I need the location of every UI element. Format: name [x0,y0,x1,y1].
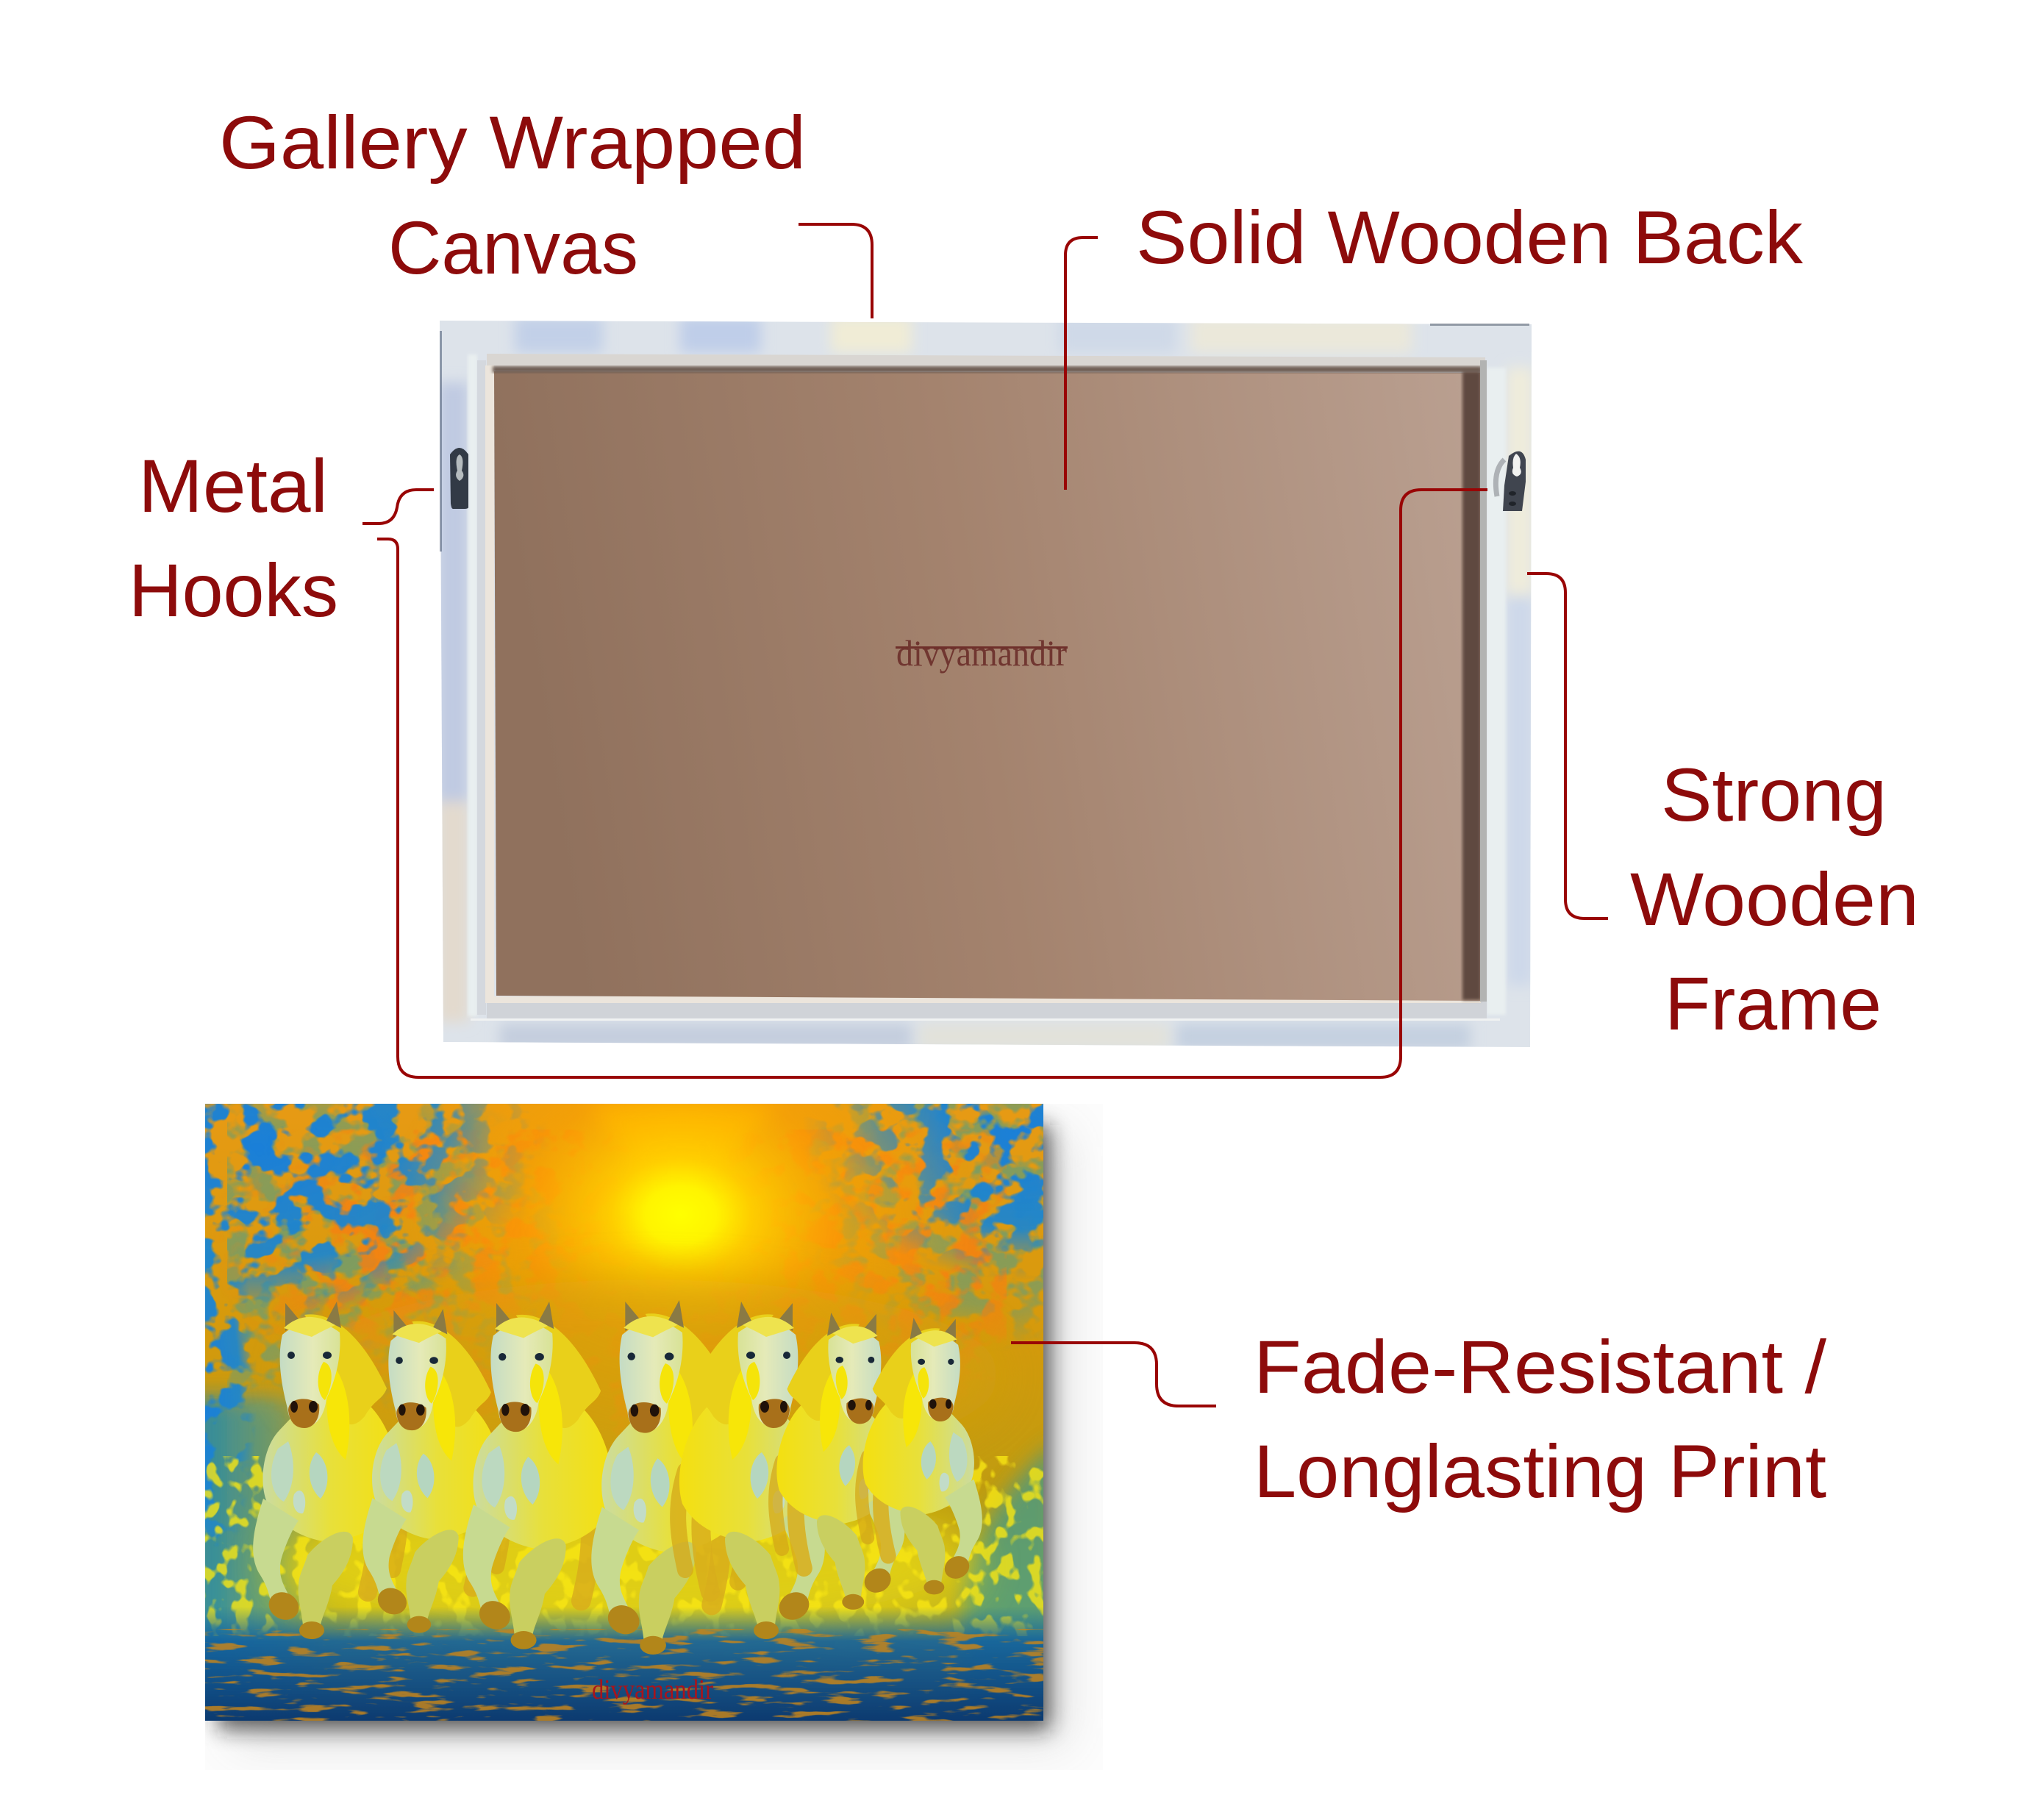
wooden back board [494,371,1481,1001]
sun [387,979,975,1450]
seven horses [253,1300,982,1655]
dark rim top right of canvas [1430,324,1529,326]
heading: Strong Wooden Frame: Frame [1665,962,1882,1046]
heading: Metal Hooks: Metal [138,444,328,528]
heading: Metal Hooks: Hooks [129,549,338,632]
horse 2 [362,1309,504,1633]
heading: Gallery Wrapped Canvas: Gallery Wrapped [219,101,806,185]
panel: back of framed canvas [437,316,1533,1050]
heading: Fade-Resistant Longlasting Print: Fade-Resistant / [1254,1325,1827,1409]
frame painted colour patches [437,316,1533,1050]
right grey edge strip [1480,360,1487,1002]
heading: Fade-Resistant Longlasting Print: Longlasting Print [1254,1430,1826,1513]
horse 1 [253,1302,400,1639]
heading: Strong Wooden Frame: Wooden [1630,857,1919,941]
arrow: right hook leader [377,490,1487,1077]
yellow ground glow [272,1493,978,1640]
right inner shadow [1462,371,1481,1000]
horse 7 [862,1318,982,1594]
water base [205,1607,1043,1721]
heading: Fade-Resistant Longlasting Print [1254,1325,1827,1513]
painting drop shadow [205,1104,1103,1770]
panel: front canvas painting with shadow [205,1104,1087,1763]
horse 3 [463,1302,615,1649]
arrow: solid wooden back leader [1065,238,1098,490]
teal side washes [205,1381,1043,1672]
arrow: gallery wrapped canvas leader [799,224,872,318]
heading: Solid Wooden Back: Solid Wooden Back [1136,196,1804,279]
blue sky patches [0,971,1243,1581]
heading: Strong Wooden Frame: Strong [1661,753,1887,837]
heading: Gallery Wrapped Canvas: Canvas [388,206,638,290]
top edge shadow [493,366,1482,373]
dark rim left of canvas [440,331,442,552]
cream edge around board [485,365,1481,1003]
painting: seven horses at sunrise [205,1104,1043,1721]
brand logo on board: divyamandir [896,632,1067,674]
heading: Strong Wooden Frame [1630,753,1919,1046]
orange sky patches [206,1033,1118,1460]
arrow: left hook leader [362,490,434,524]
icon: left metal hook [450,448,468,509]
infographic: canvas print features [135,114,1915,1763]
olive sky patches [81,1029,1169,1441]
arrow: strong wooden frame leader [1527,574,1608,918]
sun rays top [588,1104,779,1213]
heading: Gallery Wrapped Canvas [219,101,806,290]
greyish inner bands [471,354,1500,1021]
painting signature: divyamandir [592,1674,713,1705]
icon: right metal hook [1496,452,1526,511]
horse 4 [591,1300,746,1655]
whitish side stripes [468,354,477,1016]
canvas wrap outer frame [440,321,1532,1047]
horse 6 [776,1313,904,1610]
gold glow behind horses [294,1280,1000,1471]
horse 5 [678,1302,825,1639]
orange water ripples [205,1629,1043,1721]
heading: Metal Hooks [129,444,338,632]
arrow: fade resistant leader [1011,1343,1216,1406]
yellow splashes [205,1456,1043,1636]
